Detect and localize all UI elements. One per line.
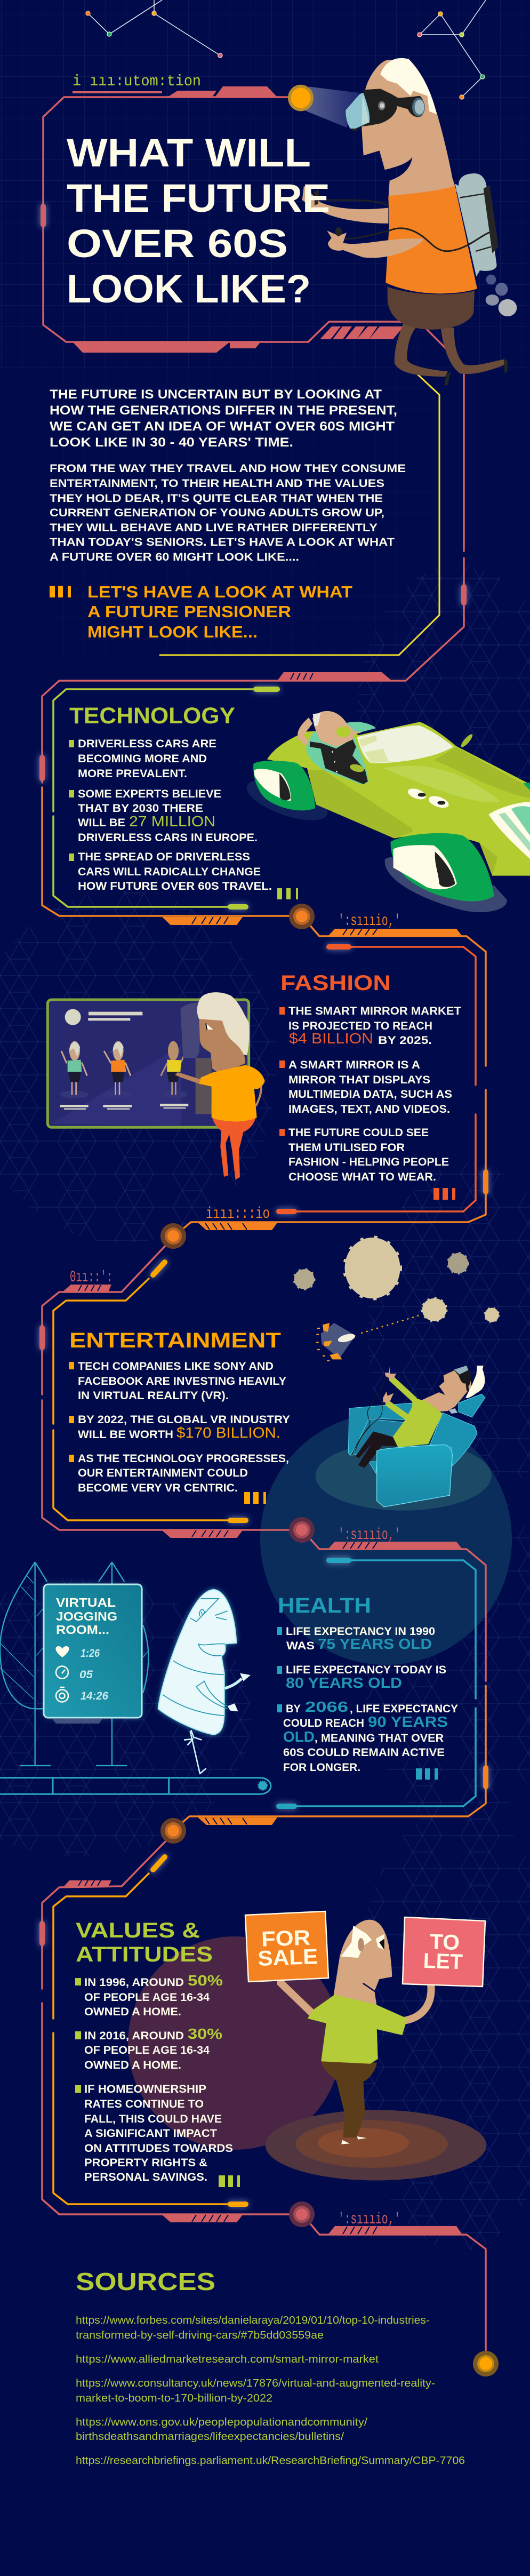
front wheel — [253, 761, 315, 810]
intro paragraph 1: HOW THE GENERATIONS DIFFER IN THE PRESENT, — [50, 403, 397, 418]
health text: 90 YEARS — [368, 1713, 448, 1730]
intro paragraph 1: THE FUTURE IS UNCERTAIN BUT BY LOOKING AT — [50, 387, 382, 402]
fashion text — [279, 971, 461, 1200]
values text: IN 1996, AROUND — [84, 1976, 184, 1989]
lower arm — [327, 230, 423, 258]
values text: PROPERTY RIGHTS & — [84, 2156, 207, 2169]
callout: A FUTURE PENSIONER — [87, 602, 291, 621]
hair — [380, 58, 437, 114]
circuit nodes — [160, 904, 499, 2376]
bullet markers — [279, 1007, 285, 1136]
entertainment text: AS THE TECHNOLOGY PROGRESSES, — [78, 1452, 289, 1465]
health text: OLD — [283, 1728, 315, 1745]
jetpack — [455, 173, 497, 276]
entertainment text: BY 2022, THE GLOBAL VR INDUSTRY — [78, 1413, 290, 1426]
values text: IN 2016, AROUND — [84, 2029, 184, 2042]
entertainment text: TECH COMPANIES LIKE SONY AND — [78, 1360, 274, 1373]
fashion text: $4 BILLION — [289, 1030, 373, 1047]
figure: woman's reflection — [180, 1002, 203, 1058]
values text: 50% — [188, 1972, 223, 1989]
hexagon background pattern — [0, 565, 530, 2251]
values text: RATES CONTINUE TO — [84, 2098, 204, 2110]
body — [158, 1590, 236, 1735]
headrest — [459, 1394, 485, 1417]
technology text: 27 MILLION — [129, 813, 215, 830]
technology text: SOME EXPERTS BELIEVE — [78, 787, 221, 800]
mirror header — [65, 1009, 142, 1025]
health text: WAS — [286, 1639, 315, 1652]
sign: for sale — [245, 1911, 328, 1982]
circuit fragment labels: 0ıı::': — [70, 1269, 113, 1287]
head — [362, 60, 457, 200]
bullet markers — [277, 1627, 282, 1712]
constellation right — [417, 0, 486, 99]
callout — [50, 583, 352, 641]
fashion text: CHOOSE WHAT TO WEAR. — [288, 1170, 436, 1183]
values text: OF PEOPLE AGE 16-34 — [84, 1991, 210, 2004]
callout: MIGHT LOOK LIKE... — [87, 623, 258, 641]
illustration: virtual jogging board — [44, 1584, 142, 1724]
bullet markers — [69, 1362, 74, 1462]
upper arm — [302, 186, 388, 224]
torso — [386, 186, 477, 293]
illustration: woman at mirror — [175, 992, 265, 1180]
health text: , LIFE EXPECTANCY — [350, 1702, 458, 1715]
entertainment text: BECOME VERY VR CENTRIC. — [78, 1481, 238, 1494]
wheel shadows — [242, 772, 507, 912]
illustration: asteroids — [294, 1238, 499, 1333]
sources list: https://researchbriefings.parliament.uk/ResearchBriefing/Summary/CBP-7706 — [76, 2455, 465, 2467]
chair side — [348, 1403, 412, 1455]
values text: ON ATTITUDES TOWARDS — [84, 2142, 233, 2155]
sources heading: SOURCES — [76, 2268, 215, 2295]
exhaust bubbles — [486, 275, 517, 316]
fashion text: MULTIMEDIA DATA, SUCH AS — [288, 1088, 452, 1100]
illustration: smart mirror — [47, 1000, 249, 1127]
fashion text: FASHION - HELPING PEOPLE — [288, 1155, 449, 1168]
headlights — [406, 786, 451, 810]
entertainment text: IN VIRTUAL REALITY (VR). — [78, 1389, 229, 1402]
sources list: https://www.consultancy.uk/news/17876/virtual-and-augmented-reality- — [76, 2378, 435, 2389]
chair back — [430, 1413, 477, 1466]
glowing pills — [42, 206, 486, 2204]
logo text: i ııı:utom:tion — [73, 73, 201, 90]
values text: A SIGNIFICANT IMPACT — [84, 2127, 217, 2140]
technology text: DRIVERLESS CARS ARE — [78, 737, 216, 750]
intro paragraph 2: FROM THE WAY THEY TRAVEL AND HOW THEY CONSUME — [50, 462, 406, 475]
grille — [488, 802, 530, 859]
board title — [56, 1596, 117, 1637]
car body — [267, 722, 530, 876]
readouts: 05 — [79, 1669, 93, 1681]
technology text — [69, 703, 298, 899]
sources list: birthsdeathsandmarriages/lifeexpectancies/bulletins/ — [76, 2431, 344, 2443]
board title: JOGGING — [56, 1609, 117, 1623]
fashion text: BY 2025. — [378, 1034, 432, 1047]
fashion text: THE SMART MIRROR MARKET — [288, 1004, 461, 1017]
entertainment text: ENTERTAINMENT — [69, 1329, 281, 1352]
illustration: man holding signs — [280, 1920, 431, 2144]
circuit frame lines — [42, 97, 486, 2355]
title: OVER 60S — [67, 221, 288, 266]
board title: VIRTUAL — [56, 1596, 116, 1609]
health text: 80 YEARS OLD — [286, 1674, 402, 1691]
illustration: driverless car — [242, 711, 530, 912]
values text: OWNED A HOME. — [84, 2059, 181, 2071]
board title: ROOM... — [56, 1623, 109, 1637]
title: LOOK LIKE? — [67, 267, 311, 311]
sign: to let: TO — [429, 1930, 460, 1955]
intro paragraph 2 — [50, 462, 406, 563]
health text: HEALTH — [278, 1594, 371, 1617]
entertainment text — [69, 1329, 290, 1504]
hair — [465, 1366, 485, 1398]
health text: COULD REACH — [283, 1717, 364, 1729]
goggles — [352, 89, 424, 132]
mirror figure captions — [60, 1104, 212, 1110]
health text: 2066 — [305, 1698, 348, 1715]
intro paragraph 2: ENTERTAINMENT, TO THEIR HEALTH AND THE VALUES — [50, 477, 384, 490]
icon: gauge — [56, 1666, 68, 1678]
values text: OF PEOPLE AGE 16-34 — [84, 2044, 210, 2056]
technology text: CARS WILL RADICALLY CHANGE — [78, 865, 261, 878]
projector beam — [288, 85, 359, 127]
values text: ATTITUDES — [76, 1943, 213, 1966]
fashion text: IMAGES, TEXT, AND VIDEOS. — [288, 1103, 450, 1115]
health text: LIFE EXPECTANCY TODAY IS — [286, 1663, 446, 1676]
figure: orange shirt — [103, 1041, 131, 1098]
illustration: spaceship — [316, 1323, 356, 1361]
values text: OWNED A HOME. — [84, 2005, 181, 2018]
bullet markers — [75, 1978, 81, 2093]
rear wheel — [390, 833, 494, 902]
illustration: virtual trees and treadmill — [0, 1562, 271, 1794]
title: WHAT WILL — [67, 131, 311, 175]
illustration: glowing jogger — [158, 1590, 251, 1774]
sources list: market-to-boom-to-170-billion-by-2022 — [76, 2392, 272, 2404]
callout: LET'S HAVE A LOOK AT WHAT — [87, 583, 352, 601]
circuit fragment labels: ':sıııio,' — [338, 1526, 400, 1544]
legs — [356, 1431, 397, 1468]
readouts — [79, 1647, 108, 1702]
chair seat — [377, 1445, 452, 1507]
big circle behind values — [128, 1936, 341, 2150]
readouts: 1:26 — [81, 1647, 100, 1660]
technology text: WILL BE — [78, 816, 125, 829]
sources list: https://www.forbes.com/sites/danielaraya/2019/01/10/top-10-industries- — [76, 2315, 430, 2326]
technology text: DRIVERLESS CARS IN EUROPE. — [78, 831, 258, 844]
sources list: https://www.ons.gov.uk/peoplepopulationandcommunity/ — [76, 2417, 367, 2428]
illustration: man in VR chair — [316, 1366, 492, 1511]
intro paragraph 2: CURRENT GENERATION OF YOUNG ADULTS GROW UP, — [50, 506, 384, 519]
intro paragraph 1: WE CAN GET AN IDEA OF WHAT OVER 60S MIGHT — [50, 419, 395, 434]
intro paragraph 2: THEY WILL BEHAVE AND LIVE RATHER DIFFERENTLY — [50, 521, 378, 534]
goggles — [454, 1366, 471, 1391]
hands — [383, 1367, 396, 1403]
icon: stopwatch — [56, 1687, 68, 1702]
ground rings under man — [266, 2110, 486, 2180]
intro paragraph 2: THEY HOLD DEAR, IT'S QUITE CLEAR THAT WHEN THE — [50, 492, 383, 505]
sources list — [76, 2315, 465, 2467]
health text: FOR LONGER. — [283, 1761, 360, 1774]
health text: BY — [286, 1702, 301, 1715]
intro paragraph 1 — [50, 387, 397, 450]
sources list: transformed-by-self-driving-cars/#7b5dd03559ae — [76, 2330, 324, 2341]
values text: VALUES & — [76, 1919, 200, 1942]
values text: 30% — [188, 2025, 222, 2042]
icon: heart — [55, 1646, 69, 1657]
fashion text: THE FUTURE COULD SEE — [288, 1126, 429, 1139]
technology text: THAT BY 2030 THERE — [78, 802, 203, 815]
hero character with VR goggles and jetpack — [288, 58, 517, 386]
health text: 60S COULD REMAIN ACTIVE — [283, 1746, 445, 1759]
technology text: MORE PREVALENT. — [78, 767, 187, 780]
sources list: https://www.alliedmarketresearch.com/smart-mirror-market — [76, 2354, 379, 2365]
sign: for sale: SALE — [258, 1945, 318, 1971]
sign: for sale: FOR — [261, 1926, 311, 1951]
background grid — [0, 0, 530, 656]
cables — [320, 199, 489, 251]
entertainment text: $170 BILLION. — [176, 1424, 280, 1441]
fashion text: IS PROJECTED TO REACH — [288, 1019, 432, 1032]
values text: FALL, THIS COULD HAVE — [84, 2112, 222, 2125]
health text — [277, 1594, 458, 1780]
cables — [352, 1376, 386, 1455]
intro paragraph 1: LOOK LIKE IN 30 - 40 YEARS' TIME. — [50, 435, 293, 450]
intro paragraph 2: THAN TODAY'S SENIORS. LET'S HAVE A LOOK AT WHAT — [50, 536, 395, 548]
health text: LIFE EXPECTANCY IN 1990 — [286, 1625, 435, 1638]
technology text: BECOMING MORE AND — [78, 752, 207, 765]
figure: teal shirt — [60, 1041, 89, 1098]
sign: to let: LET — [423, 1949, 463, 1974]
bullet markers — [69, 740, 74, 861]
head and neck — [421, 1370, 472, 1412]
technology text: THE SPREAD OF DRIVERLESS — [78, 850, 250, 863]
fashion text: THEM UTILISED FOR — [288, 1141, 405, 1154]
figure: yellow shirt — [161, 1041, 187, 1098]
face and shirt lines — [163, 1599, 228, 1716]
sign: to let — [403, 1917, 485, 1987]
driver — [298, 711, 376, 784]
circuit tabs — [62, 86, 462, 2235]
fashion text: MIRROR THAT DISPLAYS — [288, 1073, 430, 1086]
intro paragraph 2: A FUTURE OVER 60 MIGHT LOOK LIKE.... — [50, 551, 299, 563]
values text: PERSONAL SAVINGS. — [84, 2171, 207, 2183]
fashion text: FASHION — [280, 971, 391, 995]
entertainment text: OUR ENTERTAINMENT COULD — [78, 1466, 248, 1479]
title: THE FUTURE — [67, 176, 330, 220]
values text — [75, 1919, 240, 2187]
circuit fragment labels: ':sıııio,' — [338, 2211, 400, 2229]
health text: 75 YEARS OLD — [318, 1636, 432, 1652]
limbs — [184, 1679, 242, 1774]
entertainment text: FACEBOOK ARE INVESTING HEAVILY — [78, 1375, 286, 1387]
circuit fragment labels: iııı:::io — [206, 1205, 270, 1223]
readouts: 14:26 — [81, 1690, 108, 1702]
health text: , MEANING THAT OVER — [315, 1732, 444, 1744]
fashion text: A SMART MIRROR IS A — [288, 1058, 420, 1071]
big circle behind entertainment and health — [260, 1413, 512, 1665]
legs — [395, 323, 505, 377]
values text: IF HOMEOWNERSHIP — [84, 2083, 206, 2095]
title — [67, 131, 330, 311]
circuit fragment labels — [70, 912, 400, 2229]
constellation left — [86, 0, 222, 58]
technology text: TECHNOLOGY — [69, 703, 235, 729]
shirt and arms — [393, 1398, 443, 1447]
entertainment text: WILL BE WORTH — [78, 1428, 173, 1441]
windshield — [357, 725, 453, 763]
technology text: HOW FUTURE OVER 60S TRAVEL. — [78, 880, 272, 892]
circuit fragment labels: ':sıııio,' — [338, 912, 400, 930]
